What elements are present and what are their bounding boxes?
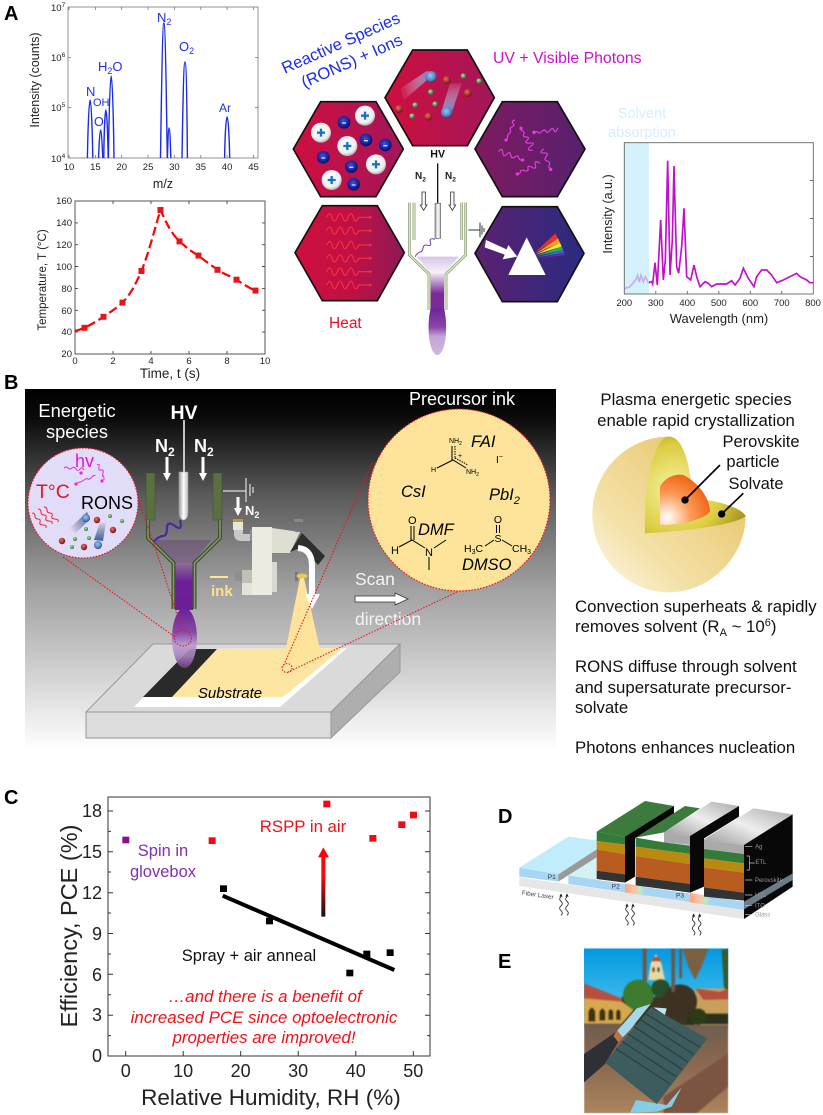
data and annotation marks [122, 801, 417, 976]
axis tick labels: 0 [92, 1046, 102, 1066]
peak labels: 2 [166, 17, 171, 27]
hexagon: reactive neutral species [385, 50, 494, 146]
chart: efficiency vs humidity [56, 797, 430, 1110]
labels: HV and nitrogen: 2 [254, 510, 259, 520]
scan direction arrow and text: direction [355, 609, 421, 629]
axis tick labels: 80 [61, 284, 72, 295]
sphere labels: particle [726, 453, 780, 471]
inset: precursor ink: PbI [489, 486, 514, 504]
inset: precursor ink: DMF [418, 521, 455, 539]
layer labels [745, 844, 784, 919]
axis tick labels: 12 [82, 883, 102, 903]
annotation: spin in glovebox [130, 842, 197, 881]
ink feed [210, 577, 233, 600]
axis tick labels: 300 [648, 298, 664, 309]
inset: energetic species: hv [75, 451, 94, 471]
text block: mechanisms: solvate [575, 698, 628, 717]
axis tick labels: 9 [92, 924, 102, 944]
axis tick labels [616, 298, 821, 309]
structure: DMF: O [408, 515, 417, 527]
axis tick labels: 25 [143, 162, 153, 173]
jet: ground symbol [468, 223, 484, 237]
labels: HV and nitrogen: N [245, 503, 254, 518]
structure: formamidinium: H [431, 467, 436, 474]
panel label: C: C [4, 787, 18, 809]
glass slab [519, 877, 744, 919]
structure: DMF: N [425, 547, 433, 559]
jet: outer tube [409, 203, 466, 310]
laser arrows [560, 897, 701, 935]
structure: DMSO: C [476, 543, 484, 555]
temperature data points [82, 207, 258, 331]
text block: mechanisms: ) [771, 617, 776, 636]
structure: formamidinium: NH [449, 438, 459, 445]
plasma hexagon diagram [293, 50, 585, 355]
axis tick labels: 40 [222, 162, 232, 173]
label: HV: HV [430, 148, 446, 160]
scan direction arrow and text: Scan [355, 569, 395, 589]
text block: mechanisms: A [720, 627, 728, 639]
panel: spray plasma process [25, 389, 556, 750]
inset: precursor ink: CsI [401, 483, 426, 501]
labels: HV and nitrogen: N [194, 436, 207, 456]
axis tick labels: 50 [403, 1061, 423, 1081]
labels: HV and nitrogen: N [155, 436, 168, 456]
axis tick labels: 5 [62, 102, 66, 109]
labels: HV and nitrogen: HV [170, 402, 198, 424]
annotation: benefit [131, 987, 398, 1047]
axis tick labels: 200 [616, 298, 632, 309]
labels: HV and nitrogen: 2 [207, 445, 214, 459]
spray cone [283, 578, 323, 663]
chart: temperature vs time [37, 196, 270, 381]
axis tick labels: 120 [56, 240, 72, 251]
heading: energetic species: species [46, 421, 108, 442]
labels: HV and nitrogen [155, 402, 259, 520]
axis tick labels: 500 [711, 298, 727, 309]
axis tick labels [51, 2, 259, 173]
label: nitrogen left: N [415, 171, 422, 182]
inset: energetic species [28, 448, 138, 558]
peak labels: Ar [219, 101, 231, 115]
structure: DMSO: O [494, 514, 502, 526]
jet: plasma arc [415, 239, 435, 257]
jet: high voltage wire and electrode [435, 163, 441, 238]
axis tick labels: 6 [62, 52, 66, 59]
axis tick labels: 160 [56, 196, 72, 207]
structure: formamidinium: 2 [459, 441, 462, 447]
axis tick labels: 10 [64, 162, 74, 173]
layer labels: ITO [755, 903, 765, 909]
nitrogen arrows [163, 457, 242, 516]
layer labels: Ag [755, 844, 762, 850]
cell stack 2 [636, 802, 739, 893]
photo: solar module held outdoors [584, 948, 728, 1113]
scan direction arrow and text [355, 569, 421, 629]
axis tick labels: 40 [346, 1061, 366, 1081]
structure: formamidinium: I [496, 455, 499, 466]
structure: formamidinium [431, 438, 503, 478]
axis tick labels: 30 [288, 1061, 308, 1081]
chart: emission spectrum [601, 106, 821, 326]
structure: DMSO [464, 514, 531, 556]
structure: formamidinium: NH [466, 469, 476, 476]
axis tick labels: 4 [62, 153, 66, 160]
axis tick labels: 3 [92, 1005, 102, 1025]
sphere labels [722, 433, 800, 493]
axis tick labels: 45 [248, 162, 259, 173]
layer labels: HTL [755, 893, 767, 899]
structure: DMF: H [391, 545, 399, 557]
structure: DMSO: H [464, 543, 472, 555]
label: nitrogen left: 2 [422, 177, 426, 184]
panel label: D: D [498, 806, 512, 828]
heading: reactive species: Reactive Species [279, 9, 403, 78]
x axis title: Wavelength (nm) [670, 311, 768, 326]
structure: formamidinium: − [499, 454, 503, 461]
dashed temperature curve [75, 210, 256, 331]
text block: mechanisms: 6 [765, 617, 771, 629]
solvent absorption band label [608, 106, 676, 141]
axis tick labels: 40 [61, 327, 72, 338]
ITO strip with scribes: P2 [612, 884, 620, 891]
plot frame and ticks [75, 201, 265, 354]
sphere labels: Perovskite [722, 433, 800, 451]
axis tick labels [56, 196, 270, 367]
labels: HV and nitrogen: 2 [168, 445, 175, 459]
zoom guides [63, 463, 457, 672]
peak labels: O [112, 59, 123, 74]
axis tick labels: 800 [805, 298, 821, 309]
gas arrow into nozzle [298, 548, 320, 609]
cell stack 3 [704, 808, 793, 919]
axis tick labels: 35 [196, 162, 206, 173]
ultrasonic sprayer [233, 519, 325, 595]
axis tick labels: 8 [224, 356, 230, 367]
heading: precursor ink: Precursor ink [409, 389, 516, 409]
axis tick labels: 30 [169, 162, 180, 173]
illustration: solvated perovskite sphere [592, 437, 746, 592]
inset: precursor ink: 2 [513, 495, 520, 507]
structure: DMSO: CH [512, 543, 527, 555]
heading: plasma energetic species: enable rapid crystallization [597, 411, 795, 430]
axis tick labels [82, 801, 423, 1081]
structure: DMSO: 3 [527, 549, 531, 556]
layer labels: ETL [755, 860, 767, 866]
x axis title: Relative Humidity, RH (%) [141, 1085, 401, 1110]
structure: formamidinium: + [458, 453, 462, 460]
chart: mass spectrum [28, 2, 259, 191]
peak labels [86, 10, 231, 129]
axis tick labels: 10 [173, 1061, 193, 1081]
axis tick labels: 20 [231, 1061, 251, 1081]
annotation: benefit: increased PCE since optoelectronic [131, 1008, 398, 1027]
inset: energetic species: T°C [36, 481, 70, 503]
emission trace [624, 161, 813, 289]
solvent absorption band label: Solvent [618, 106, 666, 122]
text block: mechanisms [575, 597, 817, 757]
axis tick labels: 4 [148, 356, 154, 367]
heading: reactive species: (RONS) + Ions [299, 31, 405, 92]
ITO strip with scribes [568, 876, 744, 910]
panel label: B: B [4, 372, 18, 394]
laser arrow heads [559, 893, 701, 917]
sphere labels: Solvate [728, 475, 784, 493]
heading: energetic species: Energetic [38, 400, 116, 421]
heading: plasma energetic species: Plasma energetic species [600, 390, 792, 409]
heading: UV and visible photons: UV + Visible Photons [493, 50, 642, 67]
hexagon: prism [475, 207, 584, 302]
inset: precursor ink: FAI [471, 433, 496, 451]
axis tick labels: 2 [110, 356, 116, 367]
arrows: nitrogen flow [420, 192, 456, 210]
axis tick labels: 0 [121, 1061, 131, 1081]
plot frame and ticks [108, 797, 430, 1056]
peak labels: H [98, 59, 107, 74]
axis tick labels: 400 [679, 298, 695, 309]
inset: energetic species: RONS [81, 493, 133, 513]
y axis title: Efficiency, PCE (%) [56, 825, 82, 1027]
peak labels: N [157, 10, 166, 25]
plot frame and ticks [68, 7, 258, 158]
ITO strip with scribes: P3 [676, 893, 684, 900]
axis tick labels: 6 [92, 965, 102, 985]
axis tick labels: 60 [61, 306, 72, 317]
diagram: solar module layers [519, 801, 793, 935]
peak labels: N [86, 84, 95, 99]
axis tick labels: 20 [61, 349, 72, 360]
axis tick labels: 20 [116, 162, 127, 173]
axis tick labels: 10 [51, 103, 62, 114]
P1 scribe section: P1 [548, 874, 556, 881]
peak labels: 2 [107, 66, 112, 76]
annotation: benefit: properties are improved! [171, 1028, 356, 1047]
panel label: E: E [498, 951, 511, 973]
label: substrate: Substrate [198, 685, 262, 702]
layer labels: Perovskite [755, 878, 784, 884]
label: nitrogen right: N [445, 171, 452, 182]
solvent absorption band [624, 143, 649, 294]
hexagon: photons [475, 102, 585, 197]
axis tick labels: 600 [742, 298, 758, 309]
axis tick labels: 700 [774, 298, 790, 309]
axis tick labels: 7 [62, 2, 66, 9]
annotation: benefit: …and there is a benefit of [168, 987, 364, 1006]
P1 scribe section [519, 837, 597, 882]
text block: mechanisms: Photons enhances nucleation [575, 738, 795, 757]
label: nitrogen right: 2 [452, 177, 456, 184]
hexagon: ions [293, 102, 403, 197]
axis tick labels: 10 [51, 3, 62, 14]
x axis title: m/z [153, 177, 173, 191]
heading: energetic species [38, 400, 116, 442]
axis tick labels: 10 [51, 53, 62, 64]
text block: mechanisms: Convection superheats & rapidly [575, 597, 817, 616]
x axis title: Time, t (s) [140, 366, 200, 381]
jet: plasma [417, 257, 459, 355]
y axis title: Intensity (a.u.) [601, 174, 615, 254]
substrate stage [86, 644, 400, 738]
axis tick labels: 10 [260, 356, 270, 367]
peak labels: 2 [189, 46, 194, 56]
structure: formamidinium: 2 [476, 472, 479, 478]
structure: DMF [391, 515, 446, 570]
plasma torch [146, 420, 222, 668]
y axis title: Temperature, T (°C) [37, 229, 49, 331]
axis tick labels: 140 [56, 218, 72, 229]
structure: DMSO: 3 [472, 549, 476, 556]
label: fiber laser: Fiber Laser [521, 890, 554, 901]
axis tick labels: 100 [56, 262, 72, 273]
annotation: spray and air anneal: Spray + air anneal [182, 947, 316, 965]
axis tick labels: 18 [82, 801, 102, 821]
peak labels: O [179, 39, 189, 54]
peak labels: O [94, 115, 104, 129]
text block: mechanisms: and supersaturate precursor- [575, 678, 791, 697]
axis tick labels: 0 [72, 356, 78, 367]
annotation: RSPP in air: RSPP in air [260, 817, 347, 836]
ink feed: ink [211, 583, 233, 600]
inset: precursor ink: DMSO [462, 556, 512, 574]
heading: heat: Heat [329, 315, 362, 332]
solvent absorption band label: absorption [608, 125, 676, 141]
hexagon: heat [295, 206, 404, 301]
layer labels: Glass [755, 913, 770, 919]
annotation: spin in glovebox: glovebox [130, 863, 197, 881]
axis tick labels: 10 [51, 154, 62, 165]
spectrum peaks [87, 23, 230, 158]
axis tick labels: 15 [82, 842, 102, 862]
ground symbol [223, 478, 253, 502]
heading: plasma energetic species [597, 390, 795, 430]
peak labels: OH [93, 97, 110, 109]
panel label: A: A [4, 3, 18, 25]
axis tick labels: 6 [186, 356, 192, 367]
annotation: spin in glovebox: Spin in [138, 842, 188, 860]
cell stack 1 [597, 801, 674, 883]
gradient backdrop [25, 389, 556, 750]
axis tick labels: 15 [90, 162, 101, 173]
inset: precursor ink [368, 409, 550, 591]
text block: mechanisms: removes solvent (R [575, 617, 720, 636]
structure: DMSO: S [494, 533, 502, 545]
plot frame and ticks [624, 143, 813, 294]
text block: mechanisms: ~ 10 [727, 617, 765, 636]
y axis title: Intensity (counts) [28, 32, 42, 128]
text block: mechanisms: RONS diffuse through solvent [575, 657, 797, 676]
